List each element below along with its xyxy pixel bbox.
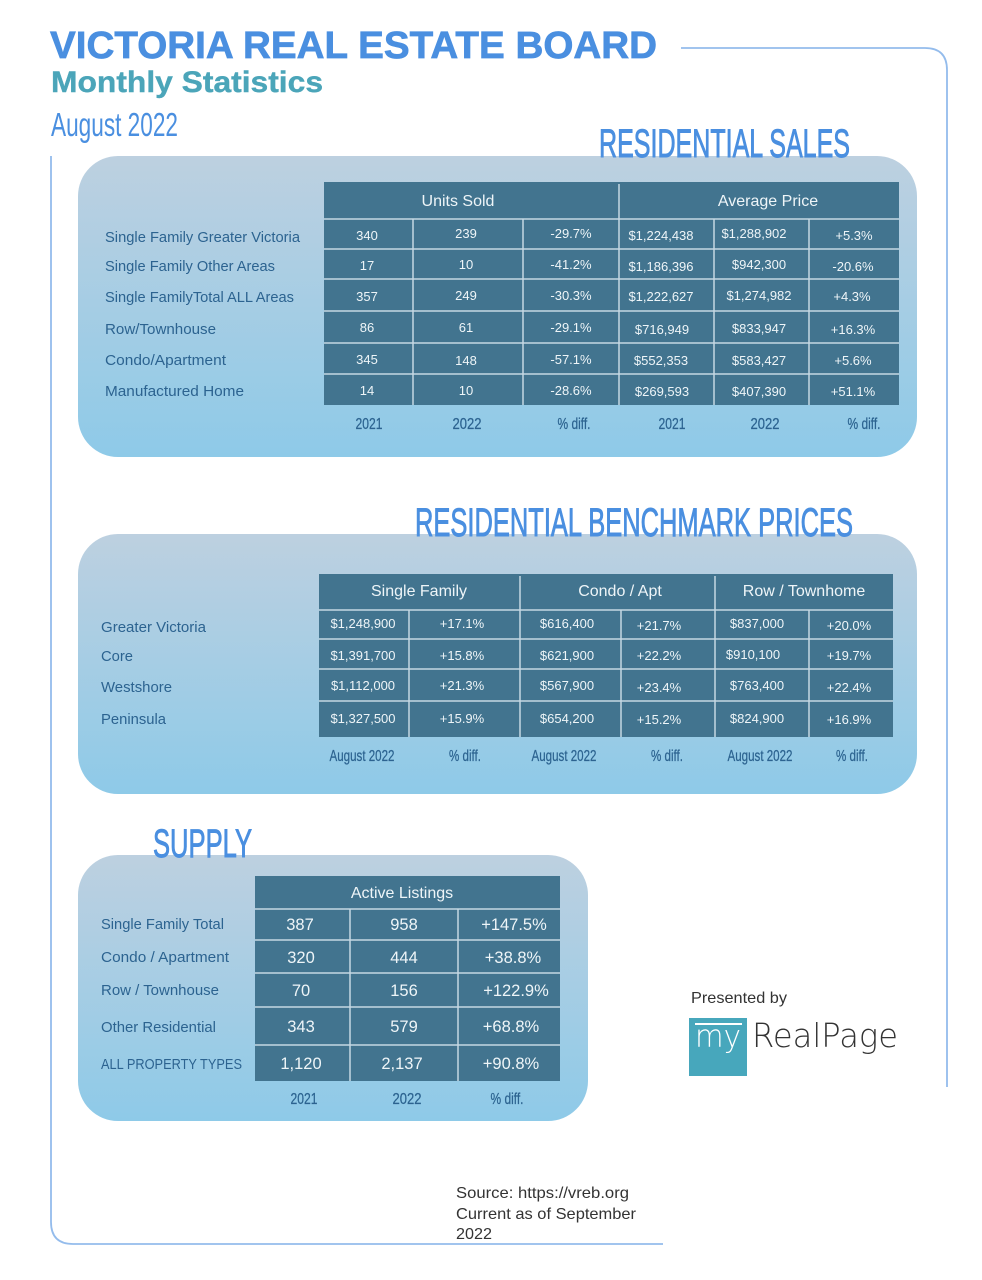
sales table: 249	[455, 288, 477, 303]
sales table: 357	[356, 289, 378, 304]
source note: Current as of September	[456, 1206, 637, 1223]
supply table: +90.8%	[483, 1055, 540, 1073]
sales table: 10	[459, 257, 473, 272]
icon: myRealPage logo: RealPage	[752, 1016, 898, 1055]
benchmark table: $616,400	[540, 616, 594, 631]
row labels: benchmark: Core	[101, 648, 133, 665]
column labels: sales: 2021	[356, 416, 383, 433]
supply table: 444	[390, 949, 418, 967]
column labels: sales: 2022	[750, 416, 780, 433]
supply table: 343	[287, 1018, 315, 1036]
sales table: 17	[360, 258, 374, 273]
benchmark table: $654,200	[540, 711, 594, 726]
supply table: 1,120	[280, 1055, 322, 1073]
benchmark table: +15.2%	[637, 712, 682, 727]
supply table: 156	[390, 982, 418, 1000]
sales table: Units Sold	[422, 193, 494, 210]
row labels: sales	[105, 229, 301, 400]
benchmark table: $1,248,900	[330, 616, 396, 631]
sales table: +16.3%	[831, 322, 876, 337]
row labels: supply: Row / Townhouse	[101, 982, 219, 999]
supply table: +38.8%	[485, 949, 542, 967]
benchmark table: +17.1%	[440, 616, 485, 631]
row labels: supply: Single Family Total	[101, 916, 224, 933]
row labels: benchmark	[101, 619, 207, 728]
row labels: supply: Condo / Apartment	[101, 949, 230, 966]
sales table: $1,288,902	[721, 226, 787, 241]
row labels: sales: Row/Townhouse	[105, 321, 216, 338]
sales table: -30.3%	[550, 288, 592, 303]
sales table: 86	[360, 320, 374, 335]
sales table: $1,274,982	[726, 288, 792, 303]
column labels: supply: 2022	[392, 1091, 422, 1108]
benchmark table: $824,900	[730, 711, 784, 726]
supply table: 320	[287, 949, 315, 967]
supply table: +147.5%	[481, 916, 547, 934]
supply table: 2,137	[381, 1055, 423, 1073]
sales table	[324, 182, 899, 405]
column labels: benchmark: % diff.	[836, 748, 868, 765]
sales table: -41.2%	[550, 257, 592, 272]
benchmark table: Single Family	[371, 583, 467, 600]
row labels: benchmark: Greater Victoria	[101, 619, 207, 636]
panel: supply	[78, 822, 588, 1121]
panel: residential sales	[78, 122, 917, 457]
column labels: sales: 2021	[658, 416, 686, 433]
column labels: benchmark: % diff.	[651, 748, 683, 765]
sales table: -28.6%	[550, 383, 592, 398]
benchmark table: +22.2%	[637, 648, 682, 663]
sales table: -29.1%	[550, 320, 592, 335]
supply table: +68.8%	[483, 1018, 540, 1036]
row labels: supply: ALL PROPERTY TYPES	[101, 1056, 242, 1073]
panel: benchmark prices	[78, 501, 917, 794]
sales table: 340	[356, 228, 378, 243]
column labels: benchmark: % diff.	[449, 748, 481, 765]
sales table: $716,949	[635, 322, 689, 337]
row labels: benchmark: Westshore	[101, 679, 172, 696]
benchmark table: $837,000	[730, 616, 784, 631]
column labels: benchmark	[330, 748, 868, 765]
benchmark table: +20.0%	[827, 618, 872, 633]
sales table: $269,593	[635, 384, 689, 399]
sales table: -57.1%	[550, 352, 592, 367]
benchmark table: +22.4%	[827, 680, 872, 695]
column labels: supply: 2021	[290, 1091, 318, 1108]
source note: Source: https://vreb.org	[456, 1185, 629, 1202]
row labels: sales: Manufactured Home	[105, 383, 244, 400]
benchmark table: +21.3%	[440, 678, 485, 693]
sales table: $552,353	[634, 353, 688, 368]
sales table: 14	[360, 383, 374, 398]
sales table: +4.3%	[833, 289, 871, 304]
heading: supply: SUPPLY	[153, 822, 252, 866]
sales table: +5.6%	[834, 353, 872, 368]
sales table: 61	[459, 320, 473, 335]
sales table: 345	[356, 352, 378, 367]
benchmark table: $1,112,000	[331, 678, 395, 693]
column labels: sales: 2022	[452, 416, 482, 433]
presented by: Presented by	[691, 990, 787, 1007]
benchmark table: $621,900	[540, 648, 594, 663]
benchmark table: +15.9%	[440, 711, 485, 726]
sales table: $583,427	[732, 353, 786, 368]
title: VICTORIA REAL ESTATE BOARD	[50, 25, 657, 67]
source note	[456, 1185, 637, 1243]
date: August 2022	[51, 106, 178, 143]
column labels: benchmark: August 2022	[728, 748, 793, 765]
benchmark table: $567,900	[540, 678, 594, 693]
benchmark table: $1,327,500	[330, 711, 396, 726]
row labels: sales: Condo/Apartment	[105, 352, 227, 369]
sales table: $942,300	[732, 257, 786, 272]
supply table: 579	[390, 1018, 418, 1036]
supply table: 387	[286, 916, 314, 934]
sales table: $1,186,396	[628, 259, 694, 274]
benchmark table: +21.7%	[637, 618, 682, 633]
column labels: supply	[290, 1091, 524, 1108]
sales table: $1,222,627	[628, 289, 694, 304]
benchmark table: Condo / Apt	[578, 583, 662, 600]
supply table: Active Listings	[351, 885, 453, 902]
benchmark table: +15.8%	[440, 648, 485, 663]
row labels: supply	[101, 916, 242, 1073]
column labels: supply: % diff.	[490, 1091, 524, 1108]
column labels: sales: % diff.	[558, 416, 590, 433]
sales table: +5.3%	[835, 228, 873, 243]
column labels: sales: % diff.	[848, 416, 880, 433]
sales table: 239	[455, 226, 477, 241]
sales table: $1,224,438	[628, 228, 694, 243]
icon: myRealPage logo: my	[695, 1019, 741, 1055]
benchmark table: +19.7%	[827, 648, 872, 663]
sales table: -20.6%	[832, 259, 874, 274]
icon: myRealPage logo	[689, 1016, 898, 1076]
supply table: 958	[390, 916, 418, 934]
row labels: sales: Single Family Other Areas	[105, 258, 275, 275]
column labels: benchmark: August 2022	[330, 748, 395, 765]
sales table: $407,390	[732, 384, 786, 399]
column labels: sales	[356, 416, 880, 433]
benchmark table: +23.4%	[637, 680, 682, 695]
benchmark table	[319, 574, 893, 737]
row labels: sales: Single FamilyTotal ALL Areas	[105, 289, 294, 306]
supply table	[255, 876, 560, 1081]
subtitle: Monthly Statistics	[51, 66, 323, 99]
column labels: benchmark: August 2022	[532, 748, 597, 765]
benchmark table: $1,391,700	[330, 648, 396, 663]
benchmark table: +16.9%	[827, 712, 872, 727]
sales table: -29.7%	[550, 226, 592, 241]
sales table: 10	[459, 383, 473, 398]
benchmark table: $910,100	[726, 647, 780, 662]
source note: 2022	[456, 1226, 492, 1243]
sales table: +51.1%	[831, 384, 876, 399]
benchmark table: $763,400	[730, 678, 784, 693]
row labels: benchmark: Peninsula	[101, 711, 167, 728]
sales table: Average Price	[718, 193, 818, 210]
sales table: 148	[455, 353, 477, 368]
supply table: +122.9%	[483, 982, 549, 1000]
benchmark table: Row / Townhome	[743, 583, 865, 600]
row labels: supply: Other Residential	[101, 1019, 216, 1036]
supply table: 70	[292, 982, 310, 1000]
row labels: sales: Single Family Greater Victoria	[105, 229, 301, 246]
sales table: $833,947	[732, 321, 786, 336]
